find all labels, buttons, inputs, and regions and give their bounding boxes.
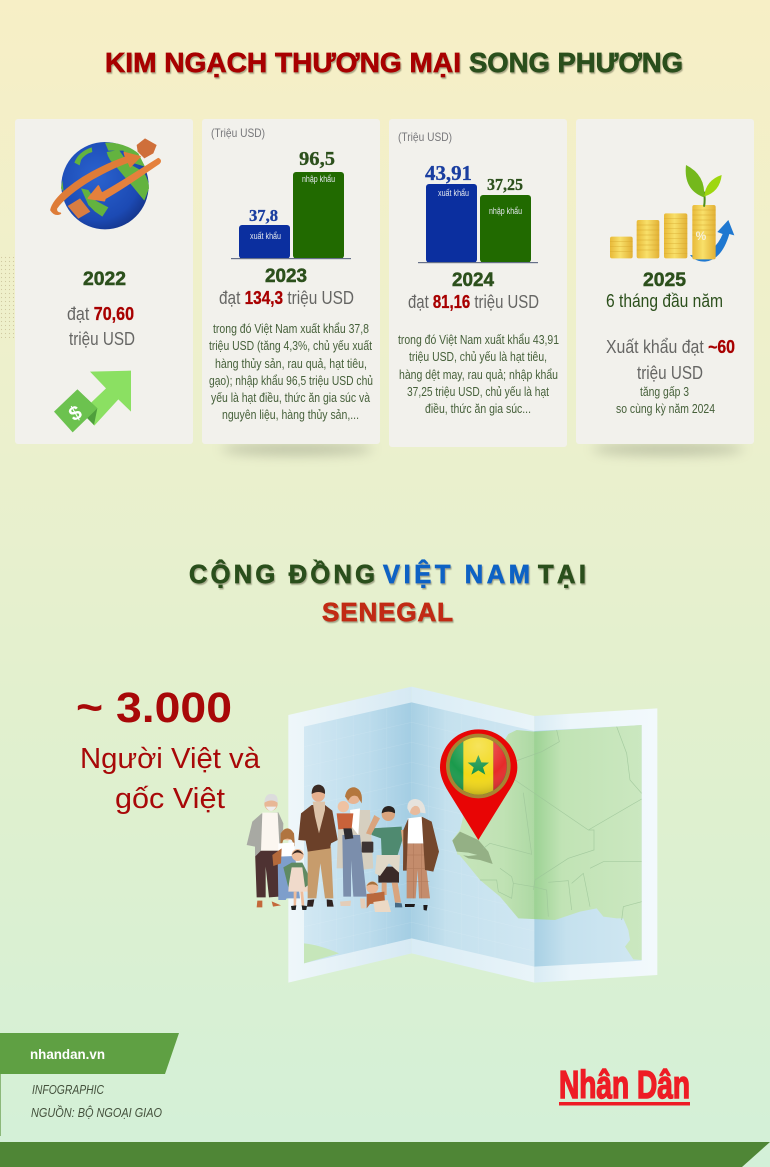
bar chart 2023: xuất khẩu bbox=[250, 231, 281, 241]
description: hàng thủy sản, rau quả, hạt tiêu, bbox=[215, 357, 367, 371]
unit: triệu USD bbox=[637, 362, 703, 383]
panel: 2025 bbox=[576, 119, 754, 444]
folded map bbox=[247, 687, 657, 983]
map paper bbox=[288, 687, 657, 983]
unit label: (Triệu USD) bbox=[211, 126, 265, 140]
card shadows bbox=[221, 443, 744, 455]
description: trong đó Việt Nam xuất khẩu 43,91 bbox=[398, 333, 559, 347]
description: trong đó Việt Nam xuất khẩu 37,8 bbox=[213, 322, 369, 336]
grandmother bbox=[403, 799, 439, 911]
heading: Vietnamese community: TẠI bbox=[538, 561, 586, 589]
bar chart 2024: xuất khẩu bbox=[438, 188, 469, 198]
map pin with Senegal flag bbox=[440, 729, 517, 840]
value: đạt 70,60 bbox=[67, 303, 134, 324]
description bbox=[398, 333, 559, 416]
description: hàng dệt may, rau quả; nhập khẩu bbox=[399, 368, 558, 382]
statistic: 3000 people: ~ 3.000 bbox=[76, 684, 232, 732]
small girl bbox=[283, 849, 311, 910]
bar chart 2024: 37,25 bbox=[487, 175, 523, 194]
year: 2024 bbox=[452, 270, 494, 291]
icon: coin stacks with plant and arrow bbox=[610, 165, 734, 262]
older girl bbox=[272, 828, 300, 900]
infographic label: INFOGRAPHIC bbox=[32, 1083, 105, 1097]
statistic: 3000 people: Người Việt và bbox=[80, 743, 261, 775]
period: 6 tháng đầu năm bbox=[606, 290, 723, 311]
grandfather bbox=[247, 794, 283, 907]
description: triệu USD (tăng 4,3%, chủ yếu xuất bbox=[209, 339, 372, 353]
heading: Vietnamese community: SENEGAL bbox=[322, 597, 453, 627]
heading: Vietnamese community: VIỆT NAM bbox=[383, 559, 530, 589]
mother with baby bbox=[337, 787, 373, 908]
source: NGUỒN: BỘ NGOẠI GIAO bbox=[31, 1105, 162, 1120]
crawling baby bbox=[366, 881, 391, 912]
panel: 2022 bbox=[15, 119, 193, 444]
footer band bbox=[0, 1142, 770, 1167]
bar chart 2023: 37,8 bbox=[249, 206, 278, 225]
value: Xuất khẩu đạt ~60 bbox=[606, 336, 735, 357]
bar chart 2023: nhập khẩu bbox=[302, 174, 335, 184]
description bbox=[209, 322, 373, 422]
description: triệu USD, chủ yếu là hạt tiêu, bbox=[409, 350, 547, 364]
bar chart 2024: 43,91 bbox=[425, 161, 472, 185]
boy bbox=[366, 806, 408, 907]
year: 2023 bbox=[265, 266, 307, 287]
title: bilateral trade: KIM NGẠCH THƯƠNG MẠI bbox=[105, 47, 461, 78]
panel: 2024 bbox=[389, 119, 567, 447]
statistic: 3000 people: gốc Việt bbox=[115, 783, 225, 815]
title: bilateral trade: SONG PHƯƠNG bbox=[469, 47, 683, 78]
value: đạt 81,16 triệu USD bbox=[408, 291, 539, 312]
map land bbox=[452, 725, 642, 960]
site name: nhandan.vn bbox=[30, 1047, 105, 1062]
heading: Vietnamese community: CỘNG ĐỒNG bbox=[189, 559, 375, 589]
statistic: 3000 people bbox=[76, 684, 261, 815]
panel: 2023 bbox=[202, 119, 380, 444]
icon: globe with trade arrows bbox=[51, 138, 160, 229]
father bbox=[298, 785, 338, 907]
bar chart 2023: 96,5 bbox=[299, 148, 335, 170]
icon: money with up arrow: $ bbox=[65, 401, 86, 426]
icon: money with up arrow bbox=[54, 371, 131, 432]
bar chart 2024: nhập khẩu bbox=[489, 206, 522, 216]
heading: Vietnamese community bbox=[189, 559, 586, 627]
comparison note bbox=[616, 385, 715, 416]
year: 2025 bbox=[643, 270, 686, 291]
description: nguyên liệu, hàng thủy sản,... bbox=[222, 408, 359, 422]
footer source tab bbox=[0, 1033, 179, 1136]
value: đạt 134,3 triệu USD bbox=[219, 287, 354, 308]
comparison note: so cùng kỳ năm 2024 bbox=[616, 402, 715, 416]
description: 37,25 triệu USD, chủ yếu là hạt bbox=[407, 385, 549, 399]
year: 2022 bbox=[83, 269, 126, 290]
title: bilateral trade bbox=[105, 47, 683, 78]
description: điều, thức ăn gia súc... bbox=[425, 402, 531, 416]
icon: coin stacks with plant and arrow: % bbox=[696, 229, 707, 243]
bar chart 2024 bbox=[418, 161, 538, 263]
logo: Nhân Dân: Nhân Dân bbox=[559, 1064, 690, 1107]
unit label: (Triệu USD) bbox=[398, 130, 452, 144]
bar chart 2023 bbox=[231, 148, 351, 259]
comparison note: tăng gấp 3 bbox=[640, 385, 689, 399]
description: yếu là hạt điều, thức ăn gia súc và bbox=[211, 391, 370, 405]
family illustration bbox=[247, 785, 439, 912]
unit: triệu USD bbox=[69, 328, 135, 349]
description: gạo); nhập khẩu 96,5 triệu USD chủ bbox=[209, 374, 373, 388]
